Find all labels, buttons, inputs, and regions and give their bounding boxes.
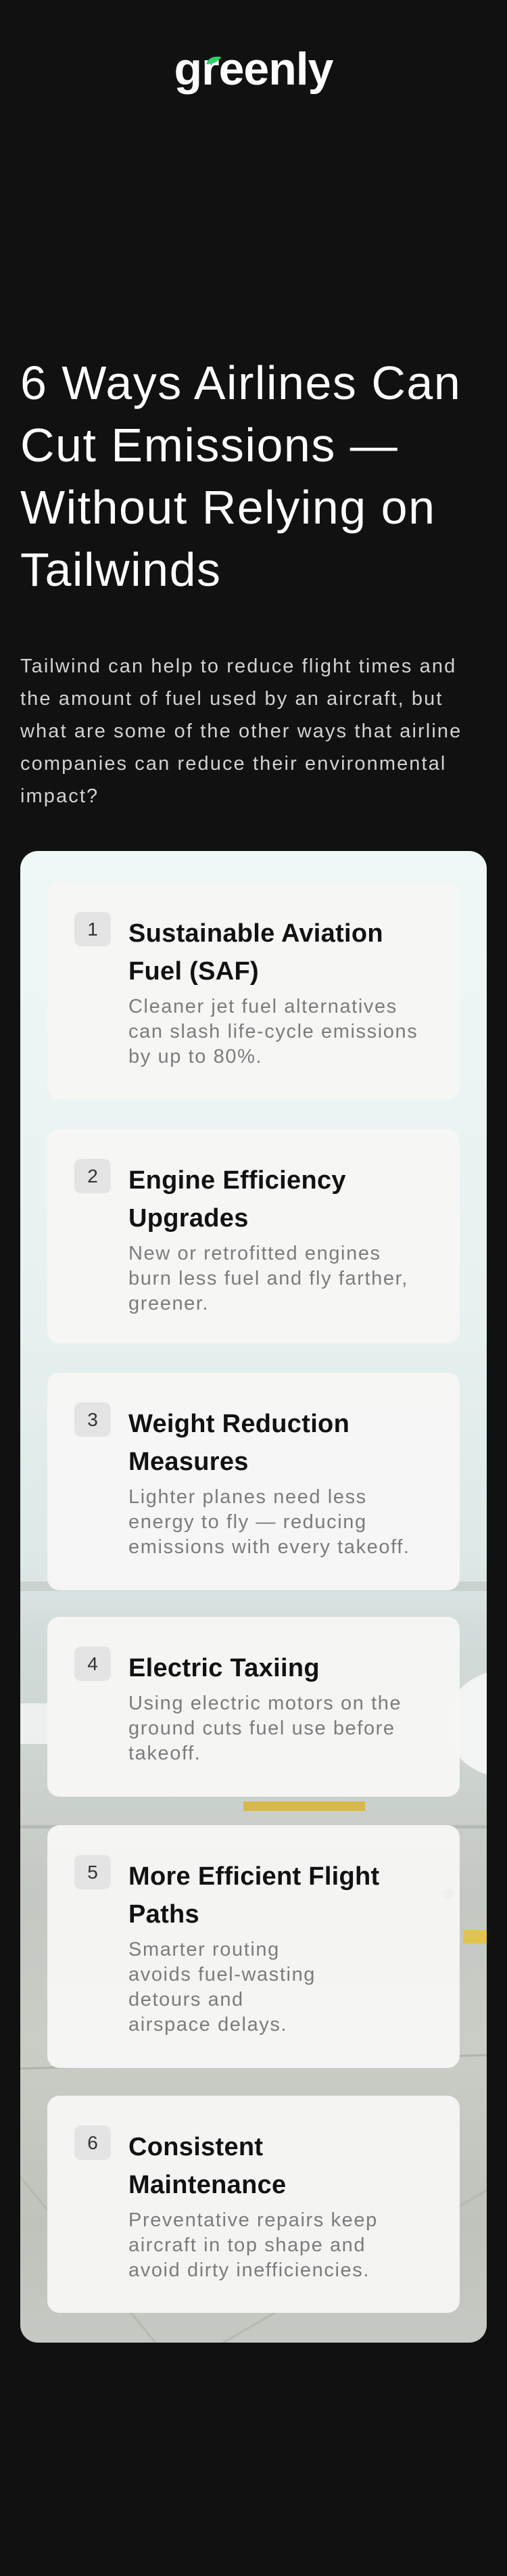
heading 2: Upgrades (128, 1204, 249, 1233)
heading 5: detours and (128, 1989, 244, 2010)
heading 5: airspace delays. (128, 2014, 287, 2036)
heading 4: takeoff. (128, 1743, 201, 1764)
heading 2 (128, 1166, 408, 1314)
heading 3: Lighter planes need less (128, 1486, 367, 1508)
card 2 (47, 1129, 460, 1343)
heading 4 (128, 1654, 402, 1764)
title (20, 356, 461, 596)
panel: list of ways (20, 851, 487, 2343)
badge 3: 3 (87, 1409, 98, 1430)
card 1 (47, 882, 460, 1099)
heading 5: More Efficient Flight (128, 1862, 380, 1891)
heading 6: Preventative repairs keep (128, 2209, 378, 2231)
heading 1 (128, 919, 418, 1067)
heading 3: emissions with every takeoff. (128, 1536, 410, 1558)
heading 2: New or retrofitted engines (128, 1243, 381, 1264)
badge 2 (74, 1159, 111, 1193)
heading 6: avoid dirty inefficiencies. (128, 2259, 370, 2281)
heading 3: Weight Reduction (128, 1410, 349, 1438)
heading 5: Paths (128, 1900, 199, 1929)
title: 6 Ways Airlines Can (20, 356, 461, 409)
heading 4: Electric Taxiing (128, 1654, 320, 1682)
badge 6 (74, 2125, 111, 2160)
badge 4 (74, 1647, 111, 1681)
heading 5 (128, 1862, 380, 2036)
heading 1: by up to 80%. (128, 1046, 262, 1067)
title: Without Relying on (20, 481, 436, 534)
badge 1: 1 (87, 919, 98, 940)
heading 2: burn less fuel and fly farther, (128, 1268, 408, 1289)
intro text: the amount of fuel used by an aircraft, but (20, 688, 443, 710)
heading 5: avoids fuel-wasting (128, 1964, 316, 1985)
intro text: Tailwind can help to reduce flight times and (20, 656, 456, 677)
heading 4: Using electric motors on the (128, 1693, 402, 1714)
heading 6 (128, 2133, 378, 2281)
badge 3 (74, 1402, 111, 1437)
card 6 (47, 2096, 460, 2313)
logo: g eenly (174, 43, 333, 95)
intro text: what are some of the other ways that airline (20, 720, 462, 742)
intro text: companies can reduce their environmental (20, 753, 446, 775)
heading 2: Engine Efficiency (128, 1166, 346, 1195)
badge 5: 5 (87, 1862, 98, 1883)
badge 2: 2 (87, 1166, 98, 1187)
badge 5 (74, 1855, 111, 1889)
heading 3: Measures (128, 1448, 249, 1476)
logo: r (201, 43, 219, 95)
heading 6: aircraft in top shape and (128, 2234, 366, 2256)
heading 1: can slash life-cycle emissions (128, 1021, 418, 1042)
heading 1: Fuel (SAF) (128, 957, 259, 986)
heading 3 (128, 1410, 410, 1558)
background: airport scene (20, 1582, 487, 2343)
title: Tailwinds (20, 543, 222, 596)
heading 2: greener. (128, 1293, 209, 1314)
heading 4: ground cuts fuel use before (128, 1718, 395, 1739)
heading 1: Cleaner jet fuel alternatives (128, 996, 397, 1017)
intro text: impact? (20, 785, 99, 807)
heading 6: Maintenance (128, 2171, 286, 2199)
heading 3: energy to fly — reducing (128, 1511, 367, 1533)
badge 1 (74, 912, 111, 946)
title: Cut Emissions — (20, 419, 398, 472)
heading 6: Consistent (128, 2133, 263, 2161)
card 3 (47, 1373, 460, 1590)
intro text (20, 656, 462, 807)
badge 6: 6 (87, 2132, 98, 2153)
badge 4: 4 (87, 1653, 98, 1674)
card 4 (47, 1617, 460, 1797)
heading 5: Smarter routing (128, 1939, 280, 1960)
card 5 (47, 1825, 460, 2068)
heading 1: Sustainable Aviation (128, 919, 383, 948)
